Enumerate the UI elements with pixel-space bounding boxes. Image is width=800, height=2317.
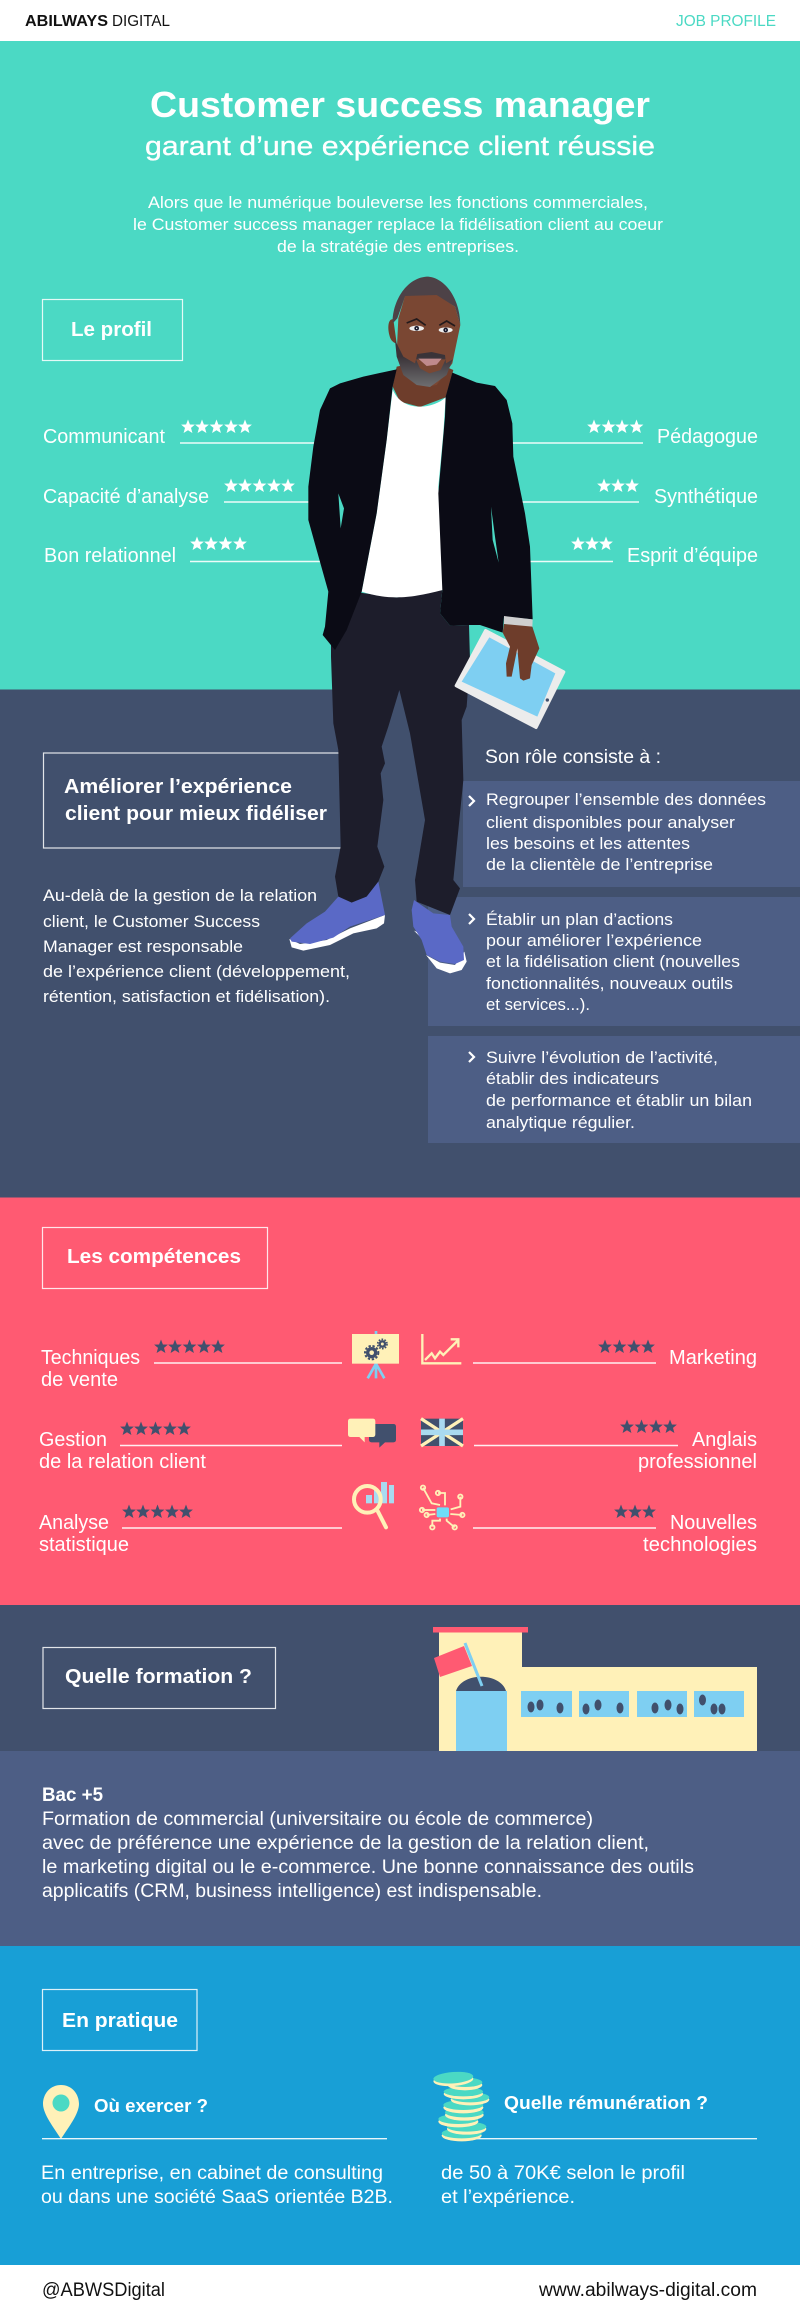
role description text: [43, 886, 350, 1006]
rating: communicant: [43, 420, 320, 448]
rating: bon relationnel: Bon relationnel: [44, 545, 176, 567]
role description text: Au-delà de la gestion de la relation: [43, 886, 317, 905]
rating: capacité d'analyse: [43, 478, 320, 508]
icon: school building: [433, 1627, 757, 1751]
role item 2: [428, 897, 800, 1026]
heading: améliorer l'expérience: client pour mieux fidéliser: [65, 803, 327, 825]
heading: en pratique: [42, 1990, 197, 2050]
head: [388, 277, 460, 387]
skill: techniques de vente: de vente: [41, 1369, 118, 1391]
rating: capacité d'analyse: Capacité d’analyse: [43, 486, 209, 508]
profile ratings right: [500, 420, 758, 567]
intro text: Alors que le numérique bouleverse les fonctions commerciales,: [148, 193, 648, 212]
skill icons: [348, 1331, 464, 1529]
subtitle: garant d’une expérience client réussie: [145, 131, 655, 161]
skills right: [473, 1340, 757, 1556]
role list heading: Son rôle consiste à :: [485, 747, 661, 768]
heading: quelle formation: [43, 1648, 276, 1708]
illustration: man with tablet: [289, 277, 564, 973]
job profile tag: JOB PROFILE: [676, 13, 776, 30]
block: quelle rémunération: [433, 2071, 757, 2208]
panel: intro and profile background: [0, 41, 800, 690]
intro text: le Customer success manager replace la fidélisation client au coeur: [133, 215, 663, 234]
rating: bon relationnel: [44, 536, 330, 567]
footer: [0, 2265, 800, 2317]
role item 2: et la fidélisation client (nouvelles: [486, 952, 740, 971]
role item 1: les besoins et les attentes: [486, 834, 690, 853]
role item 2: pour améliorer l’expérience: [486, 931, 702, 950]
icon: magnifier with bars: [354, 1482, 394, 1527]
role item 3: Suivre l’évolution de l’activité,: [486, 1048, 718, 1067]
rating: esprit d'équipe: [520, 536, 758, 567]
heading: améliorer l'expérience: Améliorer l’expérience: [64, 776, 292, 798]
trousers and shoes: [289, 590, 470, 973]
shirt: [362, 389, 446, 597]
role item 1: Regrouper l’ensemble des données: [486, 790, 766, 809]
block: où exercer: En entreprise, en cabinet de consulting: [41, 2163, 383, 2184]
skill: nouvelles technologies: technologies: [643, 1534, 757, 1556]
neck: [393, 360, 453, 407]
skill: techniques de vente: [41, 1340, 342, 1391]
role description text: rétention, satisfaction et fidélisation).: [43, 987, 330, 1006]
panel: skills background: [0, 1198, 800, 1605]
skill: nouvelles technologies: Nouvelles: [670, 1512, 757, 1534]
icon: circuit chip: [420, 1485, 464, 1529]
panel: training text: Formation de commercial (universitaire ou école de commerce): [42, 1809, 593, 1830]
heading: améliorer l'expérience: [44, 753, 364, 848]
rating: synthétique: Synthétique: [654, 486, 758, 508]
role item 3: [428, 1036, 800, 1143]
heading: en pratique: En pratique: [62, 2010, 178, 2032]
role item 1: de la clientèle de l’entreprise: [486, 855, 713, 874]
panel: training text: Bac +5: [42, 1785, 103, 1806]
heading: quelle formation: Quelle formation ?: [65, 1666, 252, 1688]
block: où exercer: ou dans une société SaaS orientée B2B.: [41, 2187, 393, 2208]
footer: www.abilways-digital.com: [538, 2280, 757, 2301]
block: où exercer: Où exercer ?: [94, 2096, 208, 2116]
skill: marketing: [473, 1340, 757, 1369]
heading: les compétences: Les compétences: [67, 1246, 241, 1268]
rating: communicant: Communicant: [43, 426, 165, 448]
skill: techniques de vente: Techniques: [41, 1347, 140, 1369]
icon: growth chart: [422, 1334, 461, 1363]
icon: map pin: [43, 2085, 79, 2139]
cuff: [504, 616, 533, 627]
skill: anglais professionnel: [474, 1420, 757, 1473]
tablet: [456, 631, 564, 727]
skills left: [39, 1340, 342, 1556]
role item 3: analytique régulier.: [486, 1113, 635, 1132]
panel: training text: le marketing digital ou le e-commerce. Une bonne connaissance des outils: [42, 1857, 694, 1878]
heading: le profil: [42, 300, 182, 360]
left shoe: [289, 882, 385, 951]
role item 3: établir des indicateurs: [486, 1069, 659, 1088]
role item 2: et services...).: [486, 995, 590, 1014]
logo: ABILWAYS: [25, 13, 108, 30]
skill: gestion de la relation client: [39, 1422, 342, 1473]
role item 1: client disponibles pour analyser: [486, 813, 735, 832]
title: Customer success manager: [150, 84, 650, 125]
skill: analyse statistique: [39, 1504, 342, 1556]
block: quelle rémunération: Quelle rémunération ?: [504, 2093, 708, 2113]
upper body: [308, 277, 564, 727]
trousers: [331, 590, 470, 915]
icon: speech bubbles: [348, 1419, 396, 1448]
skill: anglais professionnel: professionnel: [638, 1451, 757, 1473]
panel: in practice background: [0, 1946, 800, 2265]
hand: [503, 624, 539, 681]
jacket left: [308, 369, 397, 650]
logo: [25, 13, 170, 30]
skill: analyse statistique: statistique: [39, 1534, 129, 1556]
role item 3: de performance et établir un bilan: [486, 1091, 752, 1110]
intro text: [133, 193, 663, 256]
skill: marketing: Marketing: [669, 1347, 757, 1369]
rating: pédagogue: Pédagogue: [657, 426, 758, 448]
panel: training background: [0, 1605, 800, 1751]
heading: les compétences: [42, 1228, 268, 1288]
block: quelle rémunération: et l’expérience.: [441, 2187, 575, 2208]
panel: role background: [0, 690, 800, 1198]
role description text: de l’expérience client (développement,: [43, 962, 350, 981]
block: quelle rémunération: de 50 à 70K€ selon le profil: [441, 2163, 685, 2184]
role item 2: Établir un plan d’actions: [486, 910, 673, 929]
role description text: client, le Customer Success: [43, 912, 260, 931]
footer: @ABWSDigital: [42, 2280, 165, 2301]
skill: analyse statistique: Analyse: [39, 1512, 109, 1534]
panel: training text: [0, 1751, 800, 1946]
role item 1: [463, 781, 800, 887]
role item 2: fonctionnalités, nouveaux outils: [486, 974, 733, 993]
heading: le profil: Le profil: [71, 319, 152, 341]
rating: synthétique: [510, 478, 758, 508]
jacket right: [438, 373, 533, 633]
logo: DIGITAL: [112, 13, 170, 30]
intro text: de la stratégie des entreprises.: [277, 237, 519, 256]
block: où exercer: [41, 2085, 393, 2208]
role description text: Manager est responsable: [43, 937, 243, 956]
right shoe: [412, 900, 467, 973]
skill: gestion de la relation client: de la relation client: [39, 1451, 206, 1473]
header: [0, 0, 800, 41]
icon: stack of coins: [433, 2071, 489, 2141]
profile ratings left: [43, 420, 330, 567]
icon: UK flag: [421, 1419, 463, 1446]
skill: nouvelles technologies: [473, 1504, 757, 1556]
skill: gestion de la relation client: Gestion: [39, 1429, 107, 1451]
panel: training text: avec de préférence une expérience de la gestion de la relation client,: [42, 1833, 649, 1854]
panel: training text: applicatifs (CRM, business intelligence) est indispensable.: [42, 1881, 542, 1902]
rating: pédagogue: [500, 420, 758, 448]
rating: esprit d'équipe: Esprit d’équipe: [627, 545, 758, 567]
skill: anglais professionnel: Anglais: [692, 1429, 757, 1451]
icon: presentation board: [352, 1331, 399, 1378]
